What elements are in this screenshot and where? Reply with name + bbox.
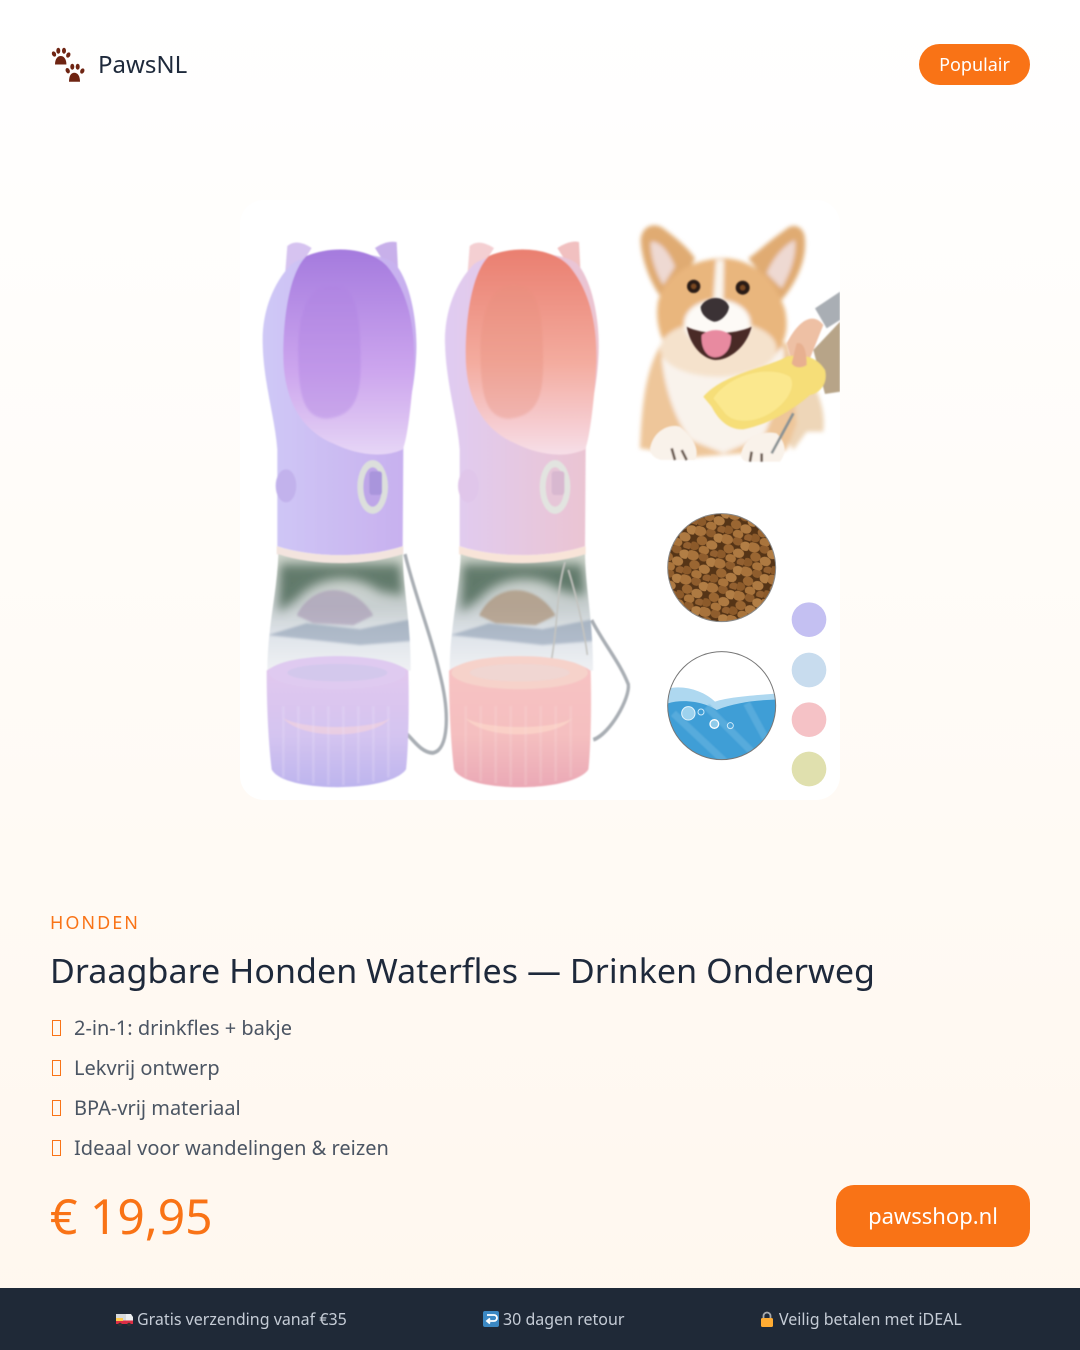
button: shop link: pawsshop.nl xyxy=(868,1201,998,1231)
feature list xyxy=(52,1014,389,1161)
collar xyxy=(459,546,586,563)
hind leg xyxy=(777,350,824,450)
glass xyxy=(267,554,411,671)
icon: return arrow xyxy=(483,1311,499,1327)
price: € 19,95 xyxy=(50,1184,213,1249)
footer: payment: Veilig betalen met iDEAL xyxy=(779,1308,962,1330)
cheeks xyxy=(660,320,777,377)
muzzle xyxy=(684,299,751,347)
icon: kibble circle xyxy=(668,514,776,622)
bottle: purple xyxy=(263,242,446,787)
blaze xyxy=(713,260,724,300)
feature: 2-in-1: 2-in-1: drinkfles + bakje xyxy=(74,1014,292,1041)
photo: corgi with bottle xyxy=(640,225,840,462)
cup xyxy=(267,657,409,787)
ears xyxy=(641,225,695,307)
tongue xyxy=(702,330,731,357)
collar xyxy=(277,546,403,563)
thumb xyxy=(792,343,807,367)
side button xyxy=(276,469,296,502)
category label: HONDEN xyxy=(50,911,140,935)
mouth xyxy=(687,327,752,360)
icon: paw prints xyxy=(52,48,84,82)
slide lock xyxy=(357,460,388,514)
swatch: pink xyxy=(792,702,826,737)
swatch: light blue xyxy=(792,653,826,687)
logo xyxy=(52,48,187,82)
footer: returns: 30 dagen retour xyxy=(503,1308,624,1330)
bowl xyxy=(466,249,596,455)
bowl xyxy=(283,249,414,455)
badge: populair: Populair xyxy=(939,53,1010,77)
lid body xyxy=(445,253,599,555)
arm sleeve xyxy=(815,292,840,328)
lead xyxy=(772,413,793,453)
ears xyxy=(467,243,494,276)
ears xyxy=(285,243,312,276)
icon: truck xyxy=(116,1314,133,1326)
slide lock xyxy=(540,460,570,514)
reflection in bowl xyxy=(298,284,361,419)
title: Draagbare Honden Waterfles — Drinken Onderweg xyxy=(50,947,875,993)
strap xyxy=(405,554,446,753)
reflection in bowl xyxy=(480,284,543,419)
bottle: pink xyxy=(445,242,628,787)
cup xyxy=(449,657,591,787)
panel: product image xyxy=(240,222,840,800)
feature: ideal for walks: Ideaal voor wandelingen & reizen xyxy=(74,1134,389,1161)
toes xyxy=(672,448,762,462)
brand name: PawsNL xyxy=(98,48,187,81)
icon: water circle xyxy=(667,651,776,760)
head xyxy=(657,258,787,367)
swatch: olive yellow xyxy=(792,752,826,786)
paws xyxy=(650,426,697,460)
swatch: lavender xyxy=(792,602,826,637)
eyes xyxy=(687,280,700,293)
badge: populair xyxy=(919,44,1030,85)
strap xyxy=(592,620,628,740)
lid body xyxy=(263,253,416,555)
inner cord xyxy=(552,562,587,659)
yellow bowl xyxy=(703,355,826,429)
feature: leakproof: Lekvrij ontwerp xyxy=(74,1054,220,1081)
icon: lock xyxy=(761,1312,773,1327)
side button xyxy=(458,469,479,502)
feature: BPA: BPA-vrij materiaal xyxy=(74,1094,241,1121)
footer bar xyxy=(0,1288,1080,1350)
glass xyxy=(450,554,593,671)
body xyxy=(640,343,797,457)
footer: shipping: Gratis verzending vanaf €35 xyxy=(137,1308,347,1330)
button: shop link xyxy=(836,1185,1030,1247)
nose xyxy=(701,298,729,322)
chest xyxy=(662,347,784,453)
bottle xyxy=(813,322,840,394)
hand xyxy=(787,319,823,367)
